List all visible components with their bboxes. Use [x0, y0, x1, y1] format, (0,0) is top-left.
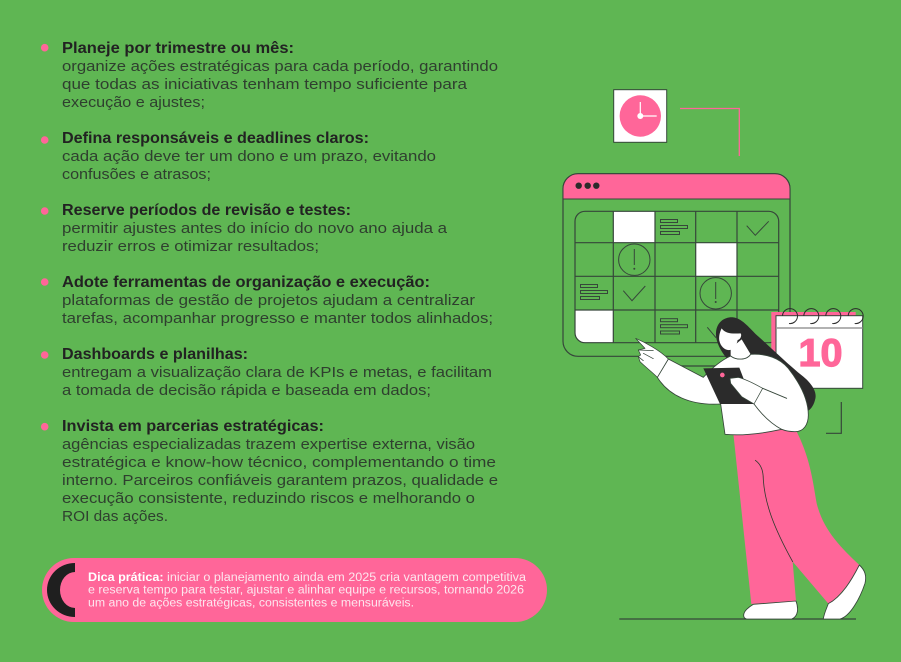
item: Reserve períodos — [41, 202, 448, 255]
shoe right — [823, 565, 866, 619]
text block: confusões e atrasos; — [62, 166, 211, 183]
neck — [731, 339, 751, 359]
callout background — [42, 558, 547, 622]
item: Adote ferramentas — [41, 274, 493, 327]
icon: half ring — [47, 563, 75, 617]
collar — [731, 354, 751, 359]
bullet — [41, 423, 48, 431]
fingers — [638, 350, 653, 361]
pointing hand — [636, 338, 668, 377]
text block: execução e ajustes; — [62, 94, 205, 111]
bullet — [41, 207, 48, 215]
callout text: Dica prática: iniciar o planejamento ainda em 2025 cria vantagem competitiva — [88, 572, 527, 584]
callout text: um ano de ações estratégicas, consistentes e mensuráveis. — [88, 598, 414, 610]
calendar page — [776, 316, 863, 388]
heading: Dashboards e planilhas: — [62, 346, 248, 363]
icon: task bars — [580, 220, 688, 334]
text block: que todas as iniciativas tenham tempo suficiente para — [62, 76, 468, 93]
sweater — [657, 354, 808, 435]
text block — [62, 292, 493, 327]
tablet — [703, 368, 753, 404]
desk calendar: day 10 — [771, 309, 863, 388]
sleeve lines — [754, 388, 787, 429]
text block: interno. Parceiros confiáveis garantem prazos, qualidade e — [62, 472, 498, 489]
text block: execução consistente, reduzindo riscos e melhorando o — [62, 490, 475, 507]
person with tablet — [636, 317, 866, 619]
white cells — [575, 211, 737, 343]
tablet light — [720, 373, 725, 377]
bullet — [41, 351, 48, 359]
text block — [62, 220, 448, 255]
face — [719, 328, 741, 350]
text block — [62, 58, 498, 111]
tablet hand — [730, 377, 763, 404]
text block — [62, 436, 498, 525]
heading: Planeje por trimestre ou mês: — [62, 40, 294, 57]
text block: reduzir erros e otimizar resultados; — [62, 238, 319, 255]
heading: Adote ferramentas de organização e execução: — [62, 274, 430, 291]
text block: permitir ajustes antes do início do novo ano ajuda a — [62, 220, 448, 237]
text block: ROI das ações. — [62, 508, 168, 525]
bullet — [41, 44, 48, 52]
text block: entregam a visualização clara de KPIs e metas, e facilitam — [62, 364, 492, 381]
trouser fold — [755, 460, 793, 562]
heading: Reserve períodos de revisão e testes: — [62, 202, 351, 219]
bullet — [41, 136, 48, 144]
text block: plataformas de gestão de projetos ajudam a centralizar — [62, 292, 475, 309]
shoe left — [744, 601, 798, 619]
pink corner line — [680, 108, 739, 156]
text block: estratégica e know-how técnico, complementando o time — [62, 454, 496, 471]
callout text: e reserva tempo para testar, ajustar e alinhar equipe e recursos, tornando 2026 — [88, 584, 524, 596]
heading: Invista em parcerias estratégicas: — [62, 418, 324, 435]
heading: Defina responsáveis e deadlines claros: — [62, 130, 369, 147]
item: Dashboards — [41, 346, 492, 399]
callout: dica prática — [42, 558, 547, 622]
window dots — [576, 182, 600, 189]
binder rings — [782, 309, 863, 324]
dark corner line — [826, 402, 841, 433]
trousers — [733, 428, 859, 604]
icon: check marks — [623, 221, 769, 338]
ground line — [619, 618, 856, 620]
calendar window — [563, 174, 790, 366]
window frame — [563, 174, 790, 356]
text block: tarefas, acompanhar progresso e manter todos alinhados; — [62, 310, 493, 327]
callout text — [88, 572, 527, 610]
bullet — [41, 278, 48, 286]
text block — [62, 148, 436, 183]
text block: organize ações estratégicas para cada período, garantindo — [62, 58, 498, 75]
item: Defina responsáveis — [41, 130, 436, 183]
day number: 10 — [798, 332, 842, 375]
window header — [563, 174, 790, 199]
pink backing — [771, 312, 856, 372]
text block: cada ação deve ter um dono e um prazo, evitando — [62, 148, 436, 165]
icon: alerts — [619, 244, 731, 309]
text block — [62, 364, 492, 399]
calendar grid — [575, 211, 779, 343]
hair — [716, 317, 816, 412]
text block: agências especializadas trazem expertise externa, visão — [62, 436, 475, 453]
item: Invista em parcerias — [41, 418, 498, 525]
item: Planeje por trimestre — [41, 40, 498, 111]
icon: clock card — [614, 90, 667, 142]
text block: a tomada de decisão rápida e baseada em dados; — [62, 382, 431, 399]
